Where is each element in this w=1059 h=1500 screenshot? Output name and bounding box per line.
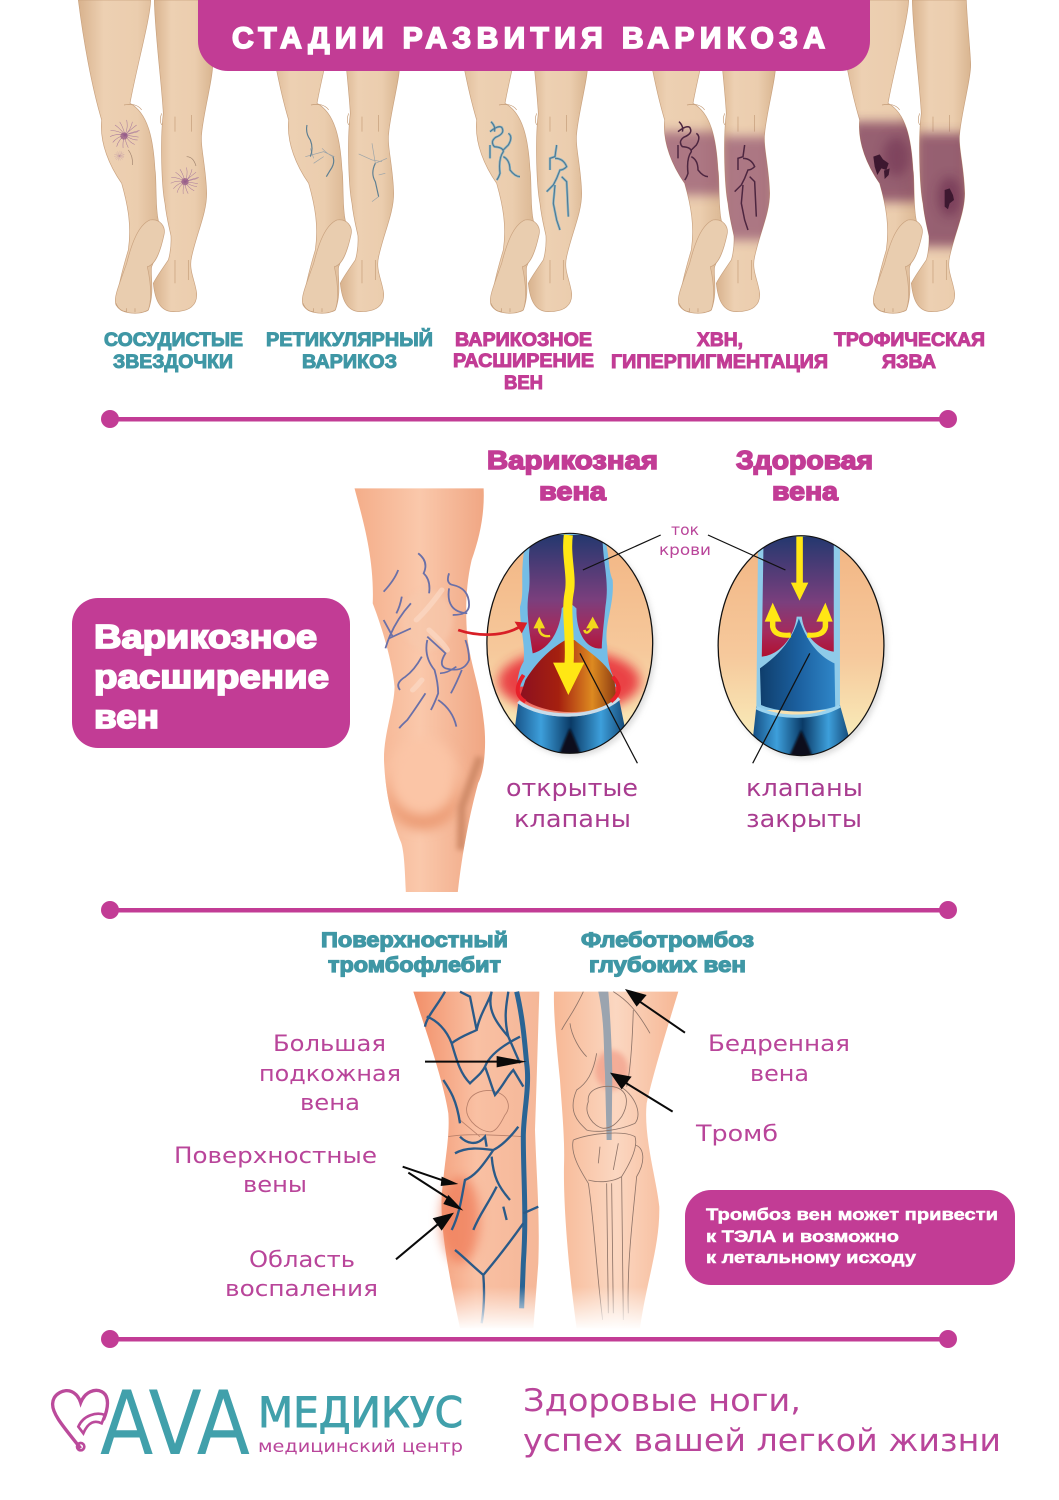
panel: varicose veins title: расширение bbox=[94, 658, 329, 695]
label: blood flow: крови bbox=[659, 541, 711, 559]
panel: varicose veins title: вен bbox=[94, 698, 159, 735]
stage 2 legs: reticular veins bbox=[265, 0, 400, 313]
blood flow arrow bbox=[568, 535, 570, 663]
blood flow arrow bbox=[791, 537, 809, 583]
label: CVI: ГИПЕРПИГМЕНТАЦИЯ bbox=[611, 352, 828, 373]
knee with deep vein thrombosis bbox=[553, 992, 683, 1330]
label: trophic ulcer: ТРОФИЧЕСКАЯ bbox=[834, 330, 985, 351]
label: CVI: ХВН, bbox=[697, 330, 743, 351]
heading: varicose vein: вена bbox=[539, 476, 607, 506]
label: reticular: РЕТИКУЛЯРНЫЙ bbox=[266, 329, 433, 351]
label: thrombus: Тромб bbox=[695, 1121, 778, 1147]
icon: heart with stethoscope bbox=[53, 1390, 107, 1450]
stage 3 legs: varicose veins bbox=[453, 0, 588, 313]
leg with varicose veins bbox=[355, 488, 485, 892]
label: varicose dilation: РАСШИРЕНИЕ bbox=[453, 351, 594, 372]
label: valves open: открытые bbox=[506, 774, 638, 802]
heading: healthy vein: Здоровая bbox=[736, 445, 873, 475]
label: femoral vein: Бедренная bbox=[708, 1031, 850, 1057]
label: blood flow: ток bbox=[671, 521, 699, 539]
label: inflammation area: Область bbox=[249, 1247, 355, 1273]
label: great saphenous vein: Большая bbox=[273, 1031, 386, 1057]
heading: deep vein thrombosis: глубоких вен bbox=[589, 954, 746, 977]
callout: thrombosis warning bbox=[685, 1190, 1015, 1285]
pointer lines and red arrow bbox=[458, 535, 810, 763]
clinic name: МЕДИКУС bbox=[258, 1388, 463, 1437]
vein diagram: varicose bbox=[487, 533, 656, 757]
knee with superficial thrombophlebitis bbox=[413, 992, 543, 1330]
label: great saphenous vein: вена bbox=[300, 1090, 360, 1116]
black arrows bbox=[396, 989, 685, 1259]
stage 1 legs: spider veins bbox=[78, 0, 213, 313]
stage 5 legs: trophic ulcer bbox=[836, 0, 971, 313]
label: valves open: клапаны bbox=[514, 805, 631, 833]
label: valves closed: клапаны bbox=[746, 774, 863, 802]
label: spider veins: ЗВЕЗДОЧКИ bbox=[113, 352, 233, 373]
label: varicose dilation: ВАРИКОЗНОЕ bbox=[455, 330, 592, 351]
panel: varicose veins title bbox=[72, 598, 350, 748]
heading: healthy vein: вена bbox=[772, 476, 839, 506]
label: inflammation area: воспаления bbox=[225, 1276, 378, 1302]
label: superficial veins: Поверхностные bbox=[174, 1143, 377, 1169]
title banner bbox=[198, 0, 870, 71]
title: СТАДИИ РАЗВИТИЯ ВАРИКОЗА bbox=[232, 22, 825, 55]
label: great saphenous vein: подкожная bbox=[259, 1061, 401, 1087]
stage labels bbox=[104, 329, 985, 394]
vein diagram: healthy bbox=[718, 535, 887, 759]
slogan: Здоровые ноги, bbox=[523, 1383, 801, 1419]
slogan: успех вашей легкой жизни bbox=[523, 1423, 1001, 1459]
label: superficial veins: вены bbox=[243, 1172, 307, 1198]
label: spider veins: СОСУДИСТЫЕ bbox=[104, 330, 243, 351]
heading: superficial thrombophlebitis: Поверхностный bbox=[321, 929, 508, 952]
panel: varicose veins title: Варикозное bbox=[94, 618, 317, 655]
label: varicose dilation: ВЕН bbox=[504, 373, 543, 394]
clinic subtitle: медицинский центр bbox=[258, 1437, 463, 1457]
callout: thrombosis warning: к ТЭЛА и возможно bbox=[706, 1227, 899, 1246]
heading: varicose vein: Варикозная bbox=[487, 445, 658, 475]
callout: thrombosis warning: к летальному исходу bbox=[706, 1248, 917, 1267]
label: femoral vein: вена bbox=[750, 1061, 809, 1087]
stage 4 legs: chronic venous insufficiency bbox=[652, 71, 776, 314]
label: trophic ulcer: ЯЗВА bbox=[882, 352, 936, 373]
label: valves closed: закрыты bbox=[746, 805, 862, 833]
AVA wordmark: AVA bbox=[100, 1372, 250, 1475]
callout: thrombosis warning: Тромбоз вен может привести bbox=[706, 1205, 998, 1224]
heading: deep vein thrombosis: Флеботромбоз bbox=[581, 929, 754, 952]
heading: superficial thrombophlebitis: тромбофлебит bbox=[328, 954, 501, 977]
label: reticular: ВАРИКОЗ bbox=[302, 352, 397, 373]
logo bbox=[53, 1372, 463, 1475]
